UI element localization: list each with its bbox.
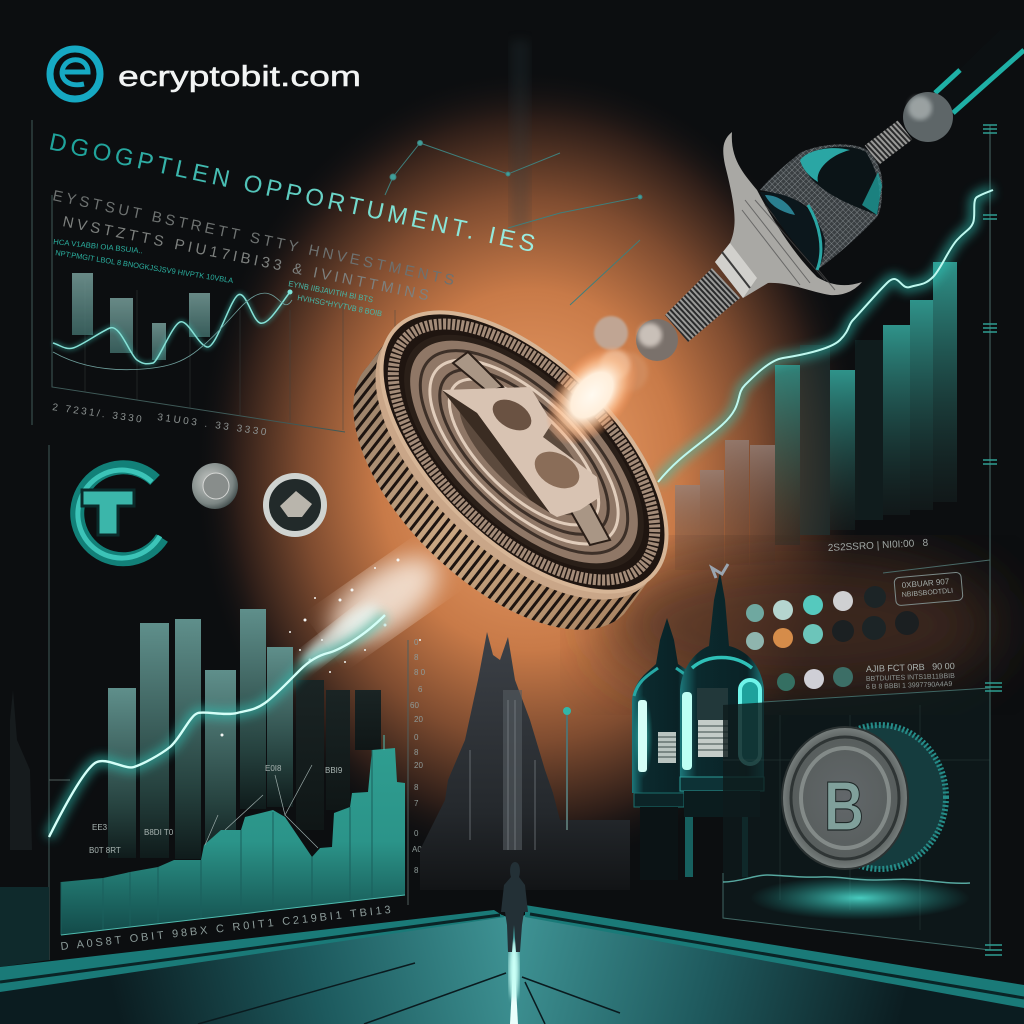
icon grid: 0XBUAR 907	[901, 577, 950, 590]
chart labels: E0I8	[265, 764, 282, 773]
coin face	[333, 264, 715, 640]
number column: 8	[414, 748, 419, 757]
floor	[0, 887, 1024, 1024]
bottle left	[632, 618, 690, 880]
icon: silver coin	[192, 463, 238, 509]
bulb	[760, 144, 882, 270]
number column: 60	[410, 701, 419, 710]
threaded shaft	[665, 268, 740, 342]
right floor	[514, 915, 1024, 1024]
light streak	[510, 950, 518, 1024]
bottles	[632, 564, 764, 880]
number column: 6	[418, 685, 423, 694]
logo	[50, 49, 361, 99]
number column: 0	[414, 733, 419, 742]
icon: teal T logo	[77, 467, 162, 559]
subheading lines: EYNB IIBJAVITIH BI BTS	[288, 279, 374, 304]
lightning trail	[49, 615, 385, 837]
coin symbol: B	[824, 767, 864, 845]
background glow	[195, 70, 865, 870]
figure	[501, 862, 528, 952]
number column: 20	[414, 761, 423, 770]
number column: 7	[414, 799, 419, 808]
logo text: ecryptobit.com	[118, 61, 361, 93]
number column	[410, 638, 426, 875]
number column: 8 0	[414, 668, 426, 677]
fire burst	[527, 327, 657, 463]
panel: upper left chart	[32, 120, 395, 960]
subheading lines: 31U03 . 33 3330	[157, 412, 267, 438]
number column: A0	[412, 845, 422, 854]
chart labels: EE3	[92, 823, 108, 832]
number column: 8 0	[414, 866, 426, 875]
subheading lines: NPT:PMGIT LBOL 8 BNOGKJSJSV9 HIVPTK 10VBLA	[55, 248, 234, 285]
subheading lines: HVIHSG*HYVTVB 8 BOIB	[297, 293, 383, 318]
syringe	[594, 30, 1024, 392]
subheading lines: HCA V1ABBI OIA BSUIA..	[53, 237, 143, 255]
panel rails	[985, 683, 1002, 955]
icon: logo ring	[50, 49, 100, 99]
panel: lower left bars	[49, 540, 453, 953]
brown panel glow	[600, 550, 1000, 700]
coin	[327, 264, 715, 648]
dust spray	[220, 540, 453, 736]
icon grid: NBIBSBODTDLI	[902, 588, 953, 599]
bottle right	[680, 564, 764, 877]
coin rear	[814, 725, 946, 869]
light beam	[510, 40, 530, 230]
number column: 8	[414, 783, 419, 792]
teal floor glow	[750, 876, 970, 920]
icon grid	[746, 572, 963, 691]
number column: 20	[414, 715, 423, 724]
coin front	[782, 727, 908, 869]
number column: 8	[414, 653, 419, 662]
heading: DGOGPTLEN OPPORTUMENT. IES	[47, 128, 538, 258]
network lines	[385, 140, 642, 305]
left floor	[0, 915, 514, 1024]
chart labels	[89, 764, 343, 855]
right teal band	[525, 905, 1024, 1008]
neck	[872, 130, 905, 155]
left teal band	[0, 910, 505, 992]
panel: coin hologram	[723, 620, 990, 950]
city skyline	[10, 632, 630, 890]
subheading lines: NVSTZTTS PIU17IBI33 & IVINTTMINS	[61, 213, 430, 304]
left wall shadow	[0, 887, 49, 967]
coin edge	[327, 272, 709, 648]
icon grid: BBTDUITES INTS1B11BBIB	[866, 673, 955, 683]
fin	[715, 132, 862, 298]
coin symbol	[442, 352, 610, 545]
subheading lines	[51, 187, 456, 438]
icons: coin row left	[77, 463, 324, 559]
chart caption: 2S2SSRO | NI0I:00 8	[828, 538, 929, 554]
icon grid: AJIB FCT 0RB 90 00	[866, 661, 955, 674]
number column: 0	[414, 829, 419, 838]
chart labels: BBI9	[325, 766, 343, 775]
subheading lines: 2 7231/. 3330	[52, 402, 143, 426]
panel: right bar chart	[658, 125, 997, 620]
chart labels: B0T 8RT	[89, 846, 121, 855]
chart labels: B8DI T0	[144, 828, 174, 837]
icon: white ring coin	[266, 476, 324, 534]
area chart	[61, 748, 405, 935]
subheading lines: EYSTSUT BSTRETT STTY HNVESTMENTS	[51, 187, 456, 289]
ball	[903, 92, 953, 142]
lightning trail	[658, 190, 993, 482]
icon grid: 6 B 8 BBBI 1 3997790A4A9	[866, 681, 953, 691]
chart caption: D A0S8T OBIT 98BX C R0IT1 C219BI1 TBI13	[60, 904, 391, 953]
number column: 0	[414, 638, 419, 647]
collar	[715, 243, 757, 298]
smoke	[594, 316, 678, 392]
